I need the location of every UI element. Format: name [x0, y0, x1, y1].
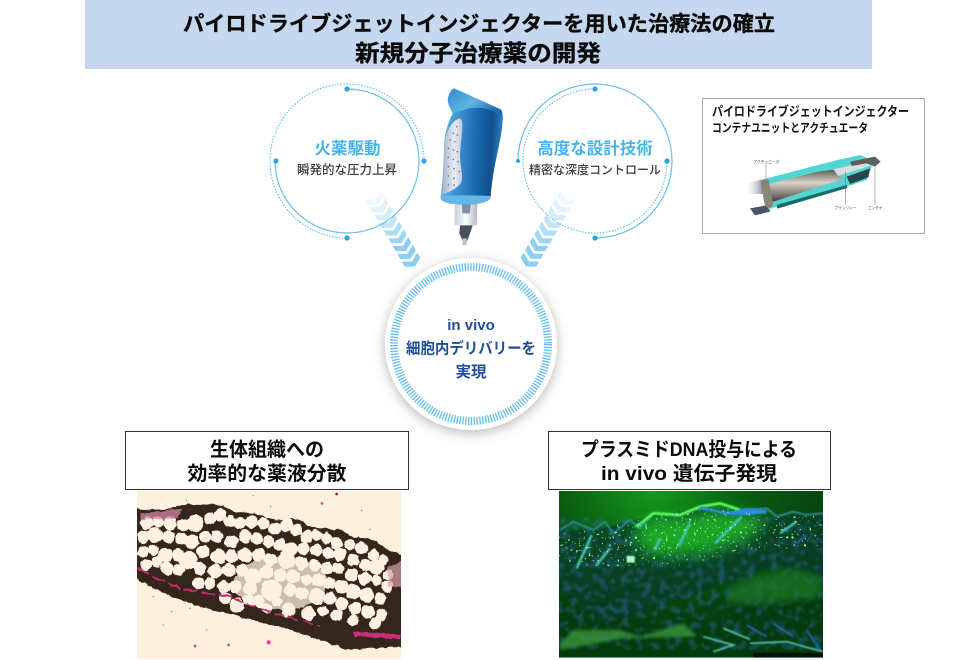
title text: 新規分子治療薬の開発: [355, 40, 601, 66]
text: delivery: 実現: [455, 363, 487, 381]
panel: tissue distribution heading: [126, 432, 408, 490]
diagram labels: アクチュエータ: [753, 158, 779, 165]
chevron arrow: left: [365, 190, 423, 271]
title text: [183, 12, 775, 66]
heading: design technology: 高度な設計技術: [537, 138, 653, 158]
panel: in vivo intracellular delivery circle: [385, 258, 557, 430]
photo: stained tissue section: [133, 491, 407, 659]
photo: fluorescence microscopy: [559, 491, 823, 658]
inset heading: パイロドライブジェットインジェクター: [712, 104, 909, 119]
diagram labels: [753, 158, 883, 212]
panel: tissue distribution heading: 効率的な薬液分散: [188, 463, 347, 485]
text: delivery: 細胞内デリバリーを: [406, 338, 536, 358]
inset heading: [712, 104, 909, 135]
text: delivery: in vivo: [447, 317, 495, 334]
panel: gene expression heading: プラスミドDNA投与による: [581, 439, 797, 461]
panel: tissue distribution heading: 生体組織への: [210, 439, 324, 461]
diagram: actuator cross-section: [745, 155, 883, 215]
diagram labels: コンテナ: [868, 206, 883, 212]
inset heading: コンテナユニットとアクチュエータ: [712, 121, 868, 135]
panel: container unit and actuator inset: [702, 98, 924, 234]
panel: gene expression heading: [548, 432, 830, 490]
panel: design technology circle: [516, 84, 672, 241]
text: pressure rise: 瞬発的な圧力上昇: [297, 162, 397, 177]
text: depth control: 精密な深度コントロール: [529, 162, 661, 177]
panel: gene expression heading: in vivo 遺伝子発現: [601, 463, 778, 485]
chevron arrow: right: [518, 190, 576, 271]
heading: pyro drive: 火薬駆動: [314, 139, 380, 158]
icon: injector device: [441, 88, 503, 245]
title banner: [85, 0, 872, 69]
text: delivery: [406, 317, 536, 381]
title text: パイロドライブジェットインジェクターを用いた治療法の確立: [183, 12, 775, 36]
diagram labels: プランジャー: [834, 206, 857, 212]
panel: pyro drive circle: [270, 84, 427, 241]
